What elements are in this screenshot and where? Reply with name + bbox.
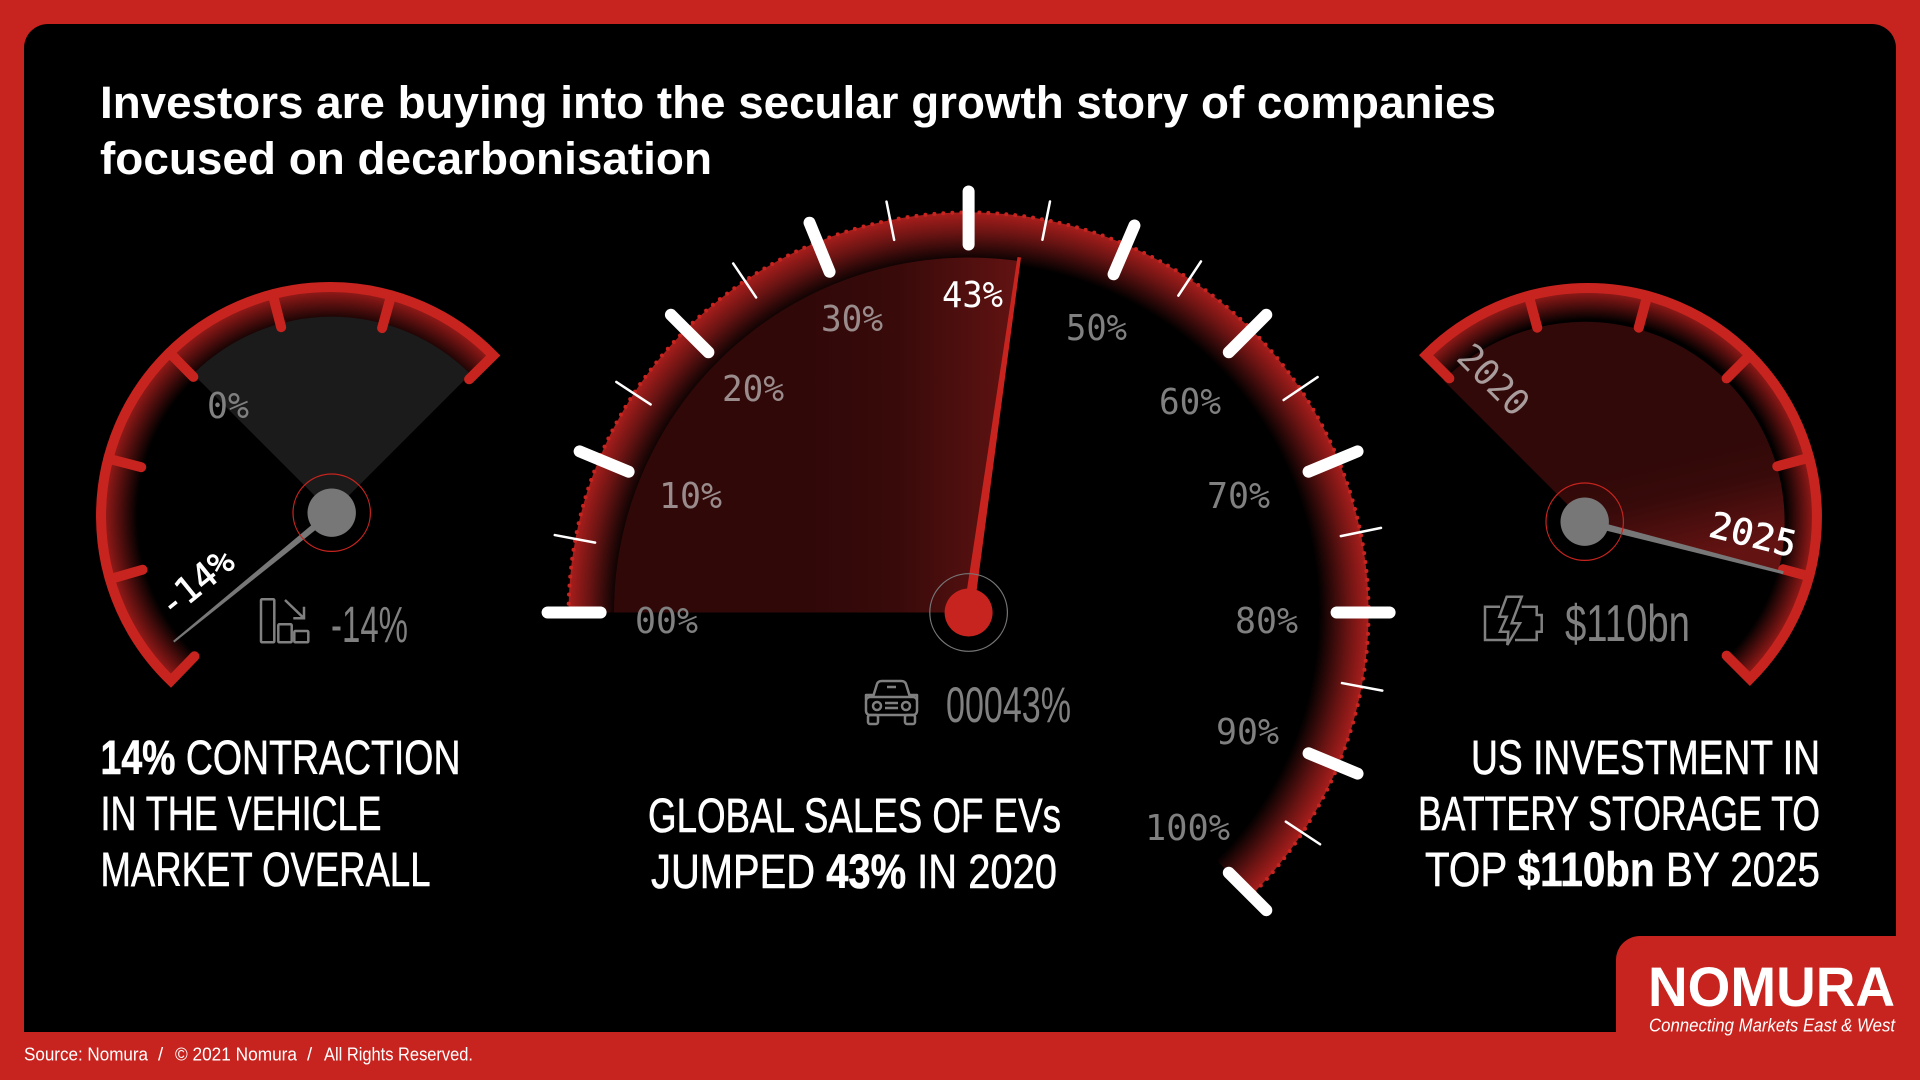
label: 2025: 2025: [1705, 505, 1801, 566]
sector: 43 percent: [614, 258, 1019, 612]
needle: [173, 510, 334, 642]
minor ticks: [555, 201, 1382, 844]
icon: battery bolt: [1485, 597, 1542, 645]
icon: falling bars: [261, 599, 308, 642]
gauge ticks: [108, 294, 391, 579]
scale labels: 80%: [1235, 601, 1298, 642]
logo: Nomura: NOMURA: [1648, 955, 1895, 1018]
gauge: vehicle market: [101, 287, 493, 681]
scale labels: 30%: [821, 299, 883, 340]
caption: battery storage: [1418, 732, 1820, 897]
scale labels: 90%: [1216, 712, 1279, 753]
sector: 2020 to 2025: [1443, 322, 1785, 571]
scale labels: 50%: [1066, 308, 1127, 349]
gauge rim: [1426, 288, 1817, 679]
title: [100, 77, 1496, 184]
source footer: /: [158, 1044, 164, 1064]
title: Investors are buying into the secular growth story of companies: [100, 77, 1496, 128]
needle: [1584, 518, 1784, 574]
source footer: © 2021 Nomura: [175, 1044, 298, 1064]
gauge band: [121, 307, 479, 666]
value: $110bn: $110bn: [1565, 595, 1690, 653]
dotted rim: [569, 212, 1369, 895]
caption: EV sales: GLOBAL SALES OF EVs: [648, 790, 1061, 843]
value: -14%: -14%: [331, 596, 408, 653]
label: 0%: 0%: [207, 386, 249, 427]
scale labels: 70%: [1207, 476, 1270, 517]
label: 2020: 2020: [1449, 336, 1537, 425]
gauge rim: [101, 287, 493, 681]
label: -14% on needle: -14%: [151, 541, 243, 626]
scale labels: 20%: [722, 369, 784, 410]
source footer: [24, 1044, 473, 1064]
caption: vehicle market: MARKET OVERALL: [100, 844, 430, 897]
icon: car: [866, 681, 917, 724]
value: 00043%: 00043%: [946, 677, 1071, 733]
source footer: Source: Nomura: [24, 1044, 149, 1064]
logo: Nomura: Connecting Markets East & West: [1649, 1016, 1896, 1036]
caption: vehicle market: IN THE VEHICLE: [100, 788, 382, 841]
sector: zero zone: [193, 317, 470, 513]
title: focused on decarbonisation: [100, 133, 712, 184]
major ticks: [548, 192, 1390, 910]
scale labels: 00%: [635, 601, 698, 642]
gauge band: [569, 212, 1369, 895]
caption: vehicle market: [100, 732, 460, 897]
source footer: All Rights Reserved.: [324, 1044, 473, 1064]
gauge ticks: [1529, 296, 1809, 576]
caption: vehicle market: 14% CONTRACTION: [100, 732, 460, 785]
needle: [964, 257, 1021, 613]
source footer: /: [307, 1044, 313, 1064]
caption: battery storage: TOP $110bn BY 2025: [1425, 844, 1820, 897]
gauge: battery storage investment: [1426, 288, 1817, 679]
hub: [293, 474, 370, 551]
caption: EV sales: [648, 790, 1061, 899]
gauge: global EV sales: [548, 192, 1390, 910]
caption: battery storage: US INVESTMENT IN: [1471, 732, 1820, 785]
scale labels: 100%: [1145, 808, 1230, 849]
scale labels: 60%: [1159, 382, 1221, 423]
scale labels: 43%: [942, 275, 1003, 316]
scale labels: [635, 275, 1298, 849]
scale labels: 10%: [659, 476, 722, 517]
caption: EV sales: JUMPED 43% IN 2020: [651, 846, 1057, 899]
hub: [930, 574, 1007, 651]
hub: [1546, 483, 1623, 560]
gauge band: [1440, 308, 1797, 665]
